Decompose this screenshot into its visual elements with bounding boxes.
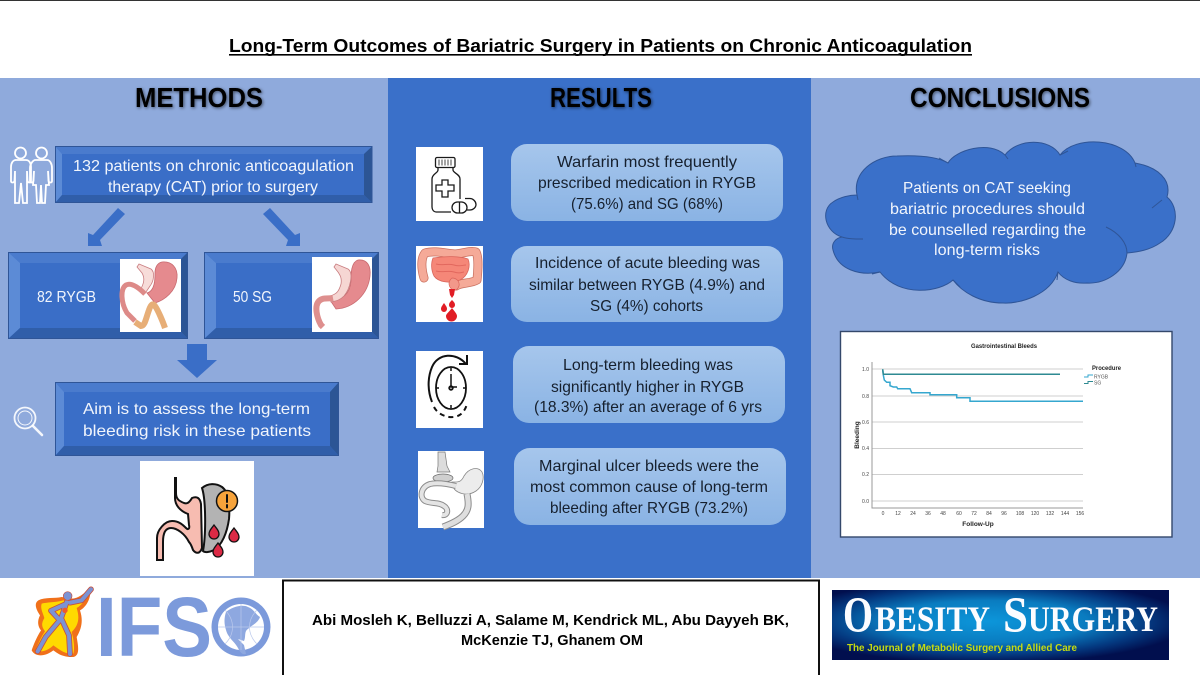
text: acute bleeding: similar between RYGB (4.9%) and bbox=[529, 277, 765, 294]
box: authors bbox=[283, 580, 819, 675]
chart: gastrointestinal bleeds: 72 bbox=[971, 511, 977, 517]
logo: Obesity Surgery: BESITY bbox=[875, 599, 990, 639]
chart: gastrointestinal bleeds: 84 bbox=[986, 511, 992, 517]
icon: patients bbox=[11, 148, 52, 203]
chart: gastrointestinal bleeds: 144 bbox=[1061, 511, 1069, 517]
text: marginal ulcer: most common cause of long-term bbox=[530, 479, 768, 496]
arrow: to SG bbox=[263, 208, 300, 246]
icon: bleeding stomach bbox=[140, 461, 254, 576]
image: RYGB anatomy bbox=[120, 259, 181, 332]
icon: marginal ulcer anatomy bbox=[418, 451, 484, 528]
chart: gastrointestinal bleeds: 0.4 bbox=[862, 446, 869, 452]
logo: Obesity Surgery: URGERY bbox=[1028, 599, 1158, 639]
callout: cloud: be counselled regarding the bbox=[889, 222, 1086, 239]
text: warfarin: Warfarin most frequently bbox=[557, 154, 737, 171]
text: long-term bleeding: Long-term bleeding was bbox=[563, 357, 733, 374]
heading: results: RESULTS bbox=[551, 83, 653, 114]
icon: magnifier bbox=[14, 408, 42, 435]
chart: gastrointestinal bleeds: 0.0 bbox=[862, 499, 869, 505]
chart: gastrointestinal bleeds: 132 bbox=[1046, 511, 1054, 517]
callout: cloud: bariatric procedures should bbox=[890, 201, 1085, 218]
logo: Obesity Surgery bbox=[832, 588, 1169, 660]
chart: gastrointestinal bleeds: 96 bbox=[1001, 511, 1007, 517]
panel: methods bbox=[0, 78, 388, 578]
logo: Obesity Surgery: The Journal of Metabolic Surgery and Allied Care bbox=[847, 643, 1077, 654]
callout: cloud: long-term risks bbox=[934, 242, 1040, 259]
text: long-term bleeding: (18.3%) after an average of 6 yrs bbox=[534, 399, 762, 416]
box: authors: McKenzie TJ, Ghanem OM bbox=[461, 633, 643, 649]
chart: gastrointestinal bleeds: 0 bbox=[882, 511, 885, 517]
icon: medication bottle bbox=[416, 147, 483, 221]
chart: gastrointestinal bleeds: 36 bbox=[925, 511, 931, 517]
heading: methods: METHODS bbox=[135, 82, 263, 113]
box: 82 RYGB bbox=[8, 252, 188, 339]
chart: gastrointestinal bleeds: 48 bbox=[940, 511, 946, 517]
text: long-term bleeding bbox=[513, 346, 785, 423]
chart: gastrointestinal bleeds bbox=[840, 332, 1172, 537]
box: 132 patients bbox=[55, 146, 372, 203]
chart: gastrointestinal bleeds: 12 bbox=[895, 511, 901, 517]
box: 50 SG: 50 SG bbox=[233, 289, 272, 306]
heading: conclusions: CONCLUSIONS bbox=[910, 82, 1090, 113]
text: acute bleeding: SG (4%) cohorts bbox=[590, 298, 703, 315]
chart: gastrointestinal bleeds: 120 bbox=[1031, 511, 1039, 517]
callout: cloud bbox=[826, 142, 1175, 303]
text: marginal ulcer: bleeding after RYGB (73.2%) bbox=[550, 500, 748, 517]
icon: clock bbox=[416, 351, 483, 428]
callout: cloud: Patients on CAT seeking bbox=[903, 180, 1071, 197]
box: 50 SG bbox=[204, 252, 379, 339]
chart: gastrointestinal bleeds: Bleeding bbox=[854, 421, 861, 449]
chart: gastrointestinal bleeds: 1.0 bbox=[862, 367, 869, 373]
text: marginal ulcer bbox=[514, 448, 786, 525]
chart: gastrointestinal bleeds: 24 bbox=[910, 511, 916, 517]
chart: gastrointestinal bleeds: 60 bbox=[956, 511, 962, 517]
box: 132 patients: 132 patients on chronic anticoagulation bbox=[73, 158, 354, 175]
chart: gastrointestinal bleeds: Gastrointestinal Bleeds bbox=[971, 344, 1038, 350]
logo: Obesity Surgery: O bbox=[843, 588, 873, 644]
text: warfarin: prescribed medication in RYGB bbox=[538, 175, 756, 192]
heading: results: RESULTS bbox=[550, 82, 652, 113]
panel: conclusions bbox=[811, 78, 1200, 578]
chart: gastrointestinal bleeds: SG bbox=[1094, 380, 1101, 386]
arrow: to RYGB bbox=[88, 208, 125, 246]
box: aim bbox=[55, 382, 339, 456]
text: long-term bleeding: significantly higher in RYGB bbox=[551, 379, 744, 396]
image: sleeve anatomy bbox=[312, 257, 372, 332]
text: warfarin: (75.6%) and SG (68%) bbox=[571, 196, 723, 213]
heading: conclusions: CONCLUSIONS bbox=[911, 83, 1091, 114]
text: warfarin bbox=[511, 144, 783, 221]
chart: gastrointestinal bleeds: 0.6 bbox=[862, 420, 869, 426]
title: Long-Term Outcomes of Bariatric Surgery in Patients on Chronic Anticoagulation bbox=[229, 35, 972, 56]
box: authors: Abi Mosleh K, Belluzzi A, Salame M, Kendrick ML, Abu Dayyeh BK, bbox=[312, 613, 789, 629]
box: 82 RYGB: 82 RYGB bbox=[37, 289, 96, 306]
chart: gastrointestinal bleeds: Follow-Up bbox=[962, 521, 994, 528]
icon: colon with bleeding bbox=[416, 246, 483, 322]
text: marginal ulcer: Marginal ulcer bleeds were the bbox=[539, 458, 759, 475]
text: acute bleeding: Incidence of acute bleeding was bbox=[535, 255, 760, 272]
chart: gastrointestinal bleeds: 0.2 bbox=[862, 472, 869, 478]
chart: gastrointestinal bleeds: 108 bbox=[1016, 511, 1024, 517]
box: aim: Aim is to assess the long-term bbox=[83, 401, 310, 418]
panel: results bbox=[388, 78, 811, 578]
text: acute bleeding bbox=[511, 246, 783, 322]
logo: IFSO: IFS bbox=[96, 580, 212, 674]
icon: globe bbox=[212, 598, 270, 656]
icon: running figure bbox=[32, 589, 91, 657]
chart: gastrointestinal bleeds: 0.8 bbox=[862, 394, 869, 400]
chart: gastrointestinal bleeds: RYGB bbox=[1094, 374, 1109, 380]
logo: IFSO bbox=[32, 580, 270, 674]
chart: gastrointestinal bleeds: 156 bbox=[1076, 511, 1084, 517]
heading: methods: METHODS bbox=[136, 83, 264, 114]
box: aim: bleeding risk in these patients bbox=[83, 423, 311, 440]
logo: Obesity Surgery: S bbox=[1003, 588, 1028, 644]
box: 132 patients: therapy (CAT) prior to surgery bbox=[108, 179, 318, 196]
arrow: to aim bbox=[177, 344, 217, 378]
chart: gastrointestinal bleeds: Procedure bbox=[1092, 365, 1121, 372]
